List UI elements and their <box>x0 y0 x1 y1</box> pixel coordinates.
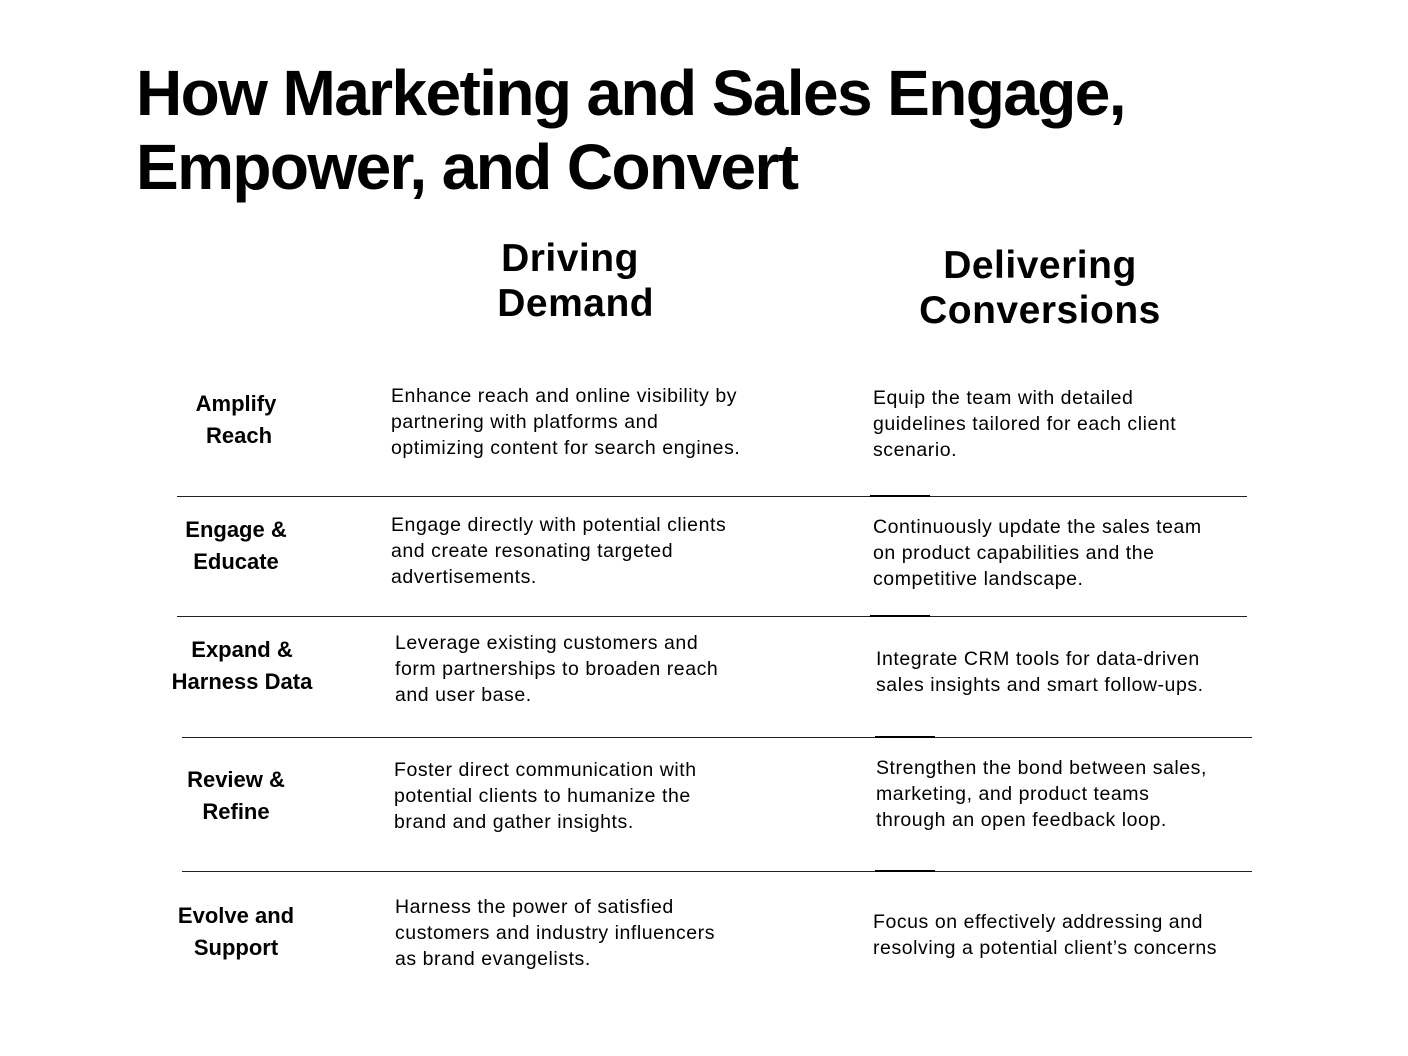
text: conversion row 3: Integrate CRM tools for data-driven <box>876 648 1200 670</box>
text: demand row 2 <box>391 514 726 588</box>
title: Empower, and Convert <box>136 131 797 203</box>
title <box>136 57 1125 203</box>
heading: Delivering Conversions: Conversions <box>919 289 1161 332</box>
text: conversion row 4: through an open feedback loop. <box>876 809 1167 831</box>
text: conversion row 4: Strengthen the bond between sales, <box>876 757 1207 779</box>
row label: Review & Refine: Refine <box>202 799 270 824</box>
title: How Marketing and Sales Engage, <box>136 57 1125 129</box>
row label: Review & Refine <box>187 767 285 824</box>
text: conversion row 3: sales insights and smart follow-ups. <box>876 674 1204 696</box>
text: conversion row 2: competitive landscape. <box>873 568 1083 590</box>
text: conversion row 5 <box>873 911 1217 959</box>
heading: Driving Demand: Demand <box>497 282 654 325</box>
text: conversion row 2 <box>873 516 1202 590</box>
row label: Evolve and Support: Support <box>194 935 278 960</box>
text: conversion row 2: Continuously update the sales team <box>873 516 1202 538</box>
text: demand row 1: optimizing content for search engines. <box>391 437 740 459</box>
row label: Engage & Educate <box>185 517 287 574</box>
text: demand row 3: form partnerships to broaden reach <box>395 658 718 680</box>
row label: Engage & Educate: Educate <box>193 549 279 574</box>
row label: Expand & Harness Data <box>172 637 312 694</box>
text: conversion row 5: resolving a potential client’s concerns <box>873 937 1217 959</box>
text: demand row 5: customers and industry influencers <box>395 922 715 944</box>
text: demand row 5 <box>395 896 715 970</box>
text: demand row 1 <box>391 385 740 459</box>
row label: Expand & Harness Data: Harness Data <box>172 669 312 694</box>
text: demand row 5: as brand evangelists. <box>395 948 591 970</box>
text: demand row 2: and create resonating targeted <box>391 540 673 562</box>
heading: Delivering Conversions: Delivering <box>943 244 1137 287</box>
text: conversion row 1: guidelines tailored for each client <box>873 413 1176 435</box>
row label: Review & Refine: Review & <box>187 767 285 792</box>
text: demand row 4: potential clients to humanize the <box>394 785 691 807</box>
row label: Expand & Harness Data: Expand & <box>191 637 293 662</box>
text: demand row 1: partnering with platforms and <box>391 411 658 433</box>
row label: Amplify Reach <box>196 391 276 448</box>
text: demand row 4 <box>394 759 697 833</box>
heading: Delivering Conversions <box>919 244 1161 332</box>
row label: Amplify Reach: Reach <box>206 423 272 448</box>
text: conversion row 1: scenario. <box>873 439 957 461</box>
text: demand row 3: and user base. <box>395 684 532 706</box>
row label: Engage & Educate: Engage & <box>185 517 287 542</box>
text: conversion row 4: marketing, and product teams <box>876 783 1149 805</box>
text: conversion row 5: Focus on effectively addressing and <box>873 911 1203 933</box>
text: demand row 4: brand and gather insights. <box>394 811 634 833</box>
text: conversion row 1 <box>873 387 1176 461</box>
text: demand row 2: Engage directly with potential clients <box>391 514 726 536</box>
text: demand row 2: advertisements. <box>391 566 537 588</box>
text: demand row 5: Harness the power of satisfied <box>395 896 674 918</box>
text: conversion row 2: on product capabilities and the <box>873 542 1155 564</box>
row label: Evolve and Support: Evolve and <box>178 903 294 928</box>
text: conversion row 1: Equip the team with detailed <box>873 387 1133 409</box>
heading: Driving Demand <box>497 237 654 325</box>
row label: Amplify Reach: Amplify <box>196 391 276 416</box>
text: demand row 1: Enhance reach and online visibility by <box>391 385 737 407</box>
text: conversion row 4 <box>876 757 1207 831</box>
text: demand row 4: Foster direct communication with <box>394 759 697 781</box>
heading: Driving Demand: Driving <box>501 237 639 280</box>
text: conversion row 3 <box>876 648 1204 696</box>
row label: Evolve and Support <box>178 903 294 960</box>
text: demand row 3 <box>395 632 718 706</box>
text: demand row 3: Leverage existing customers and <box>395 632 698 654</box>
